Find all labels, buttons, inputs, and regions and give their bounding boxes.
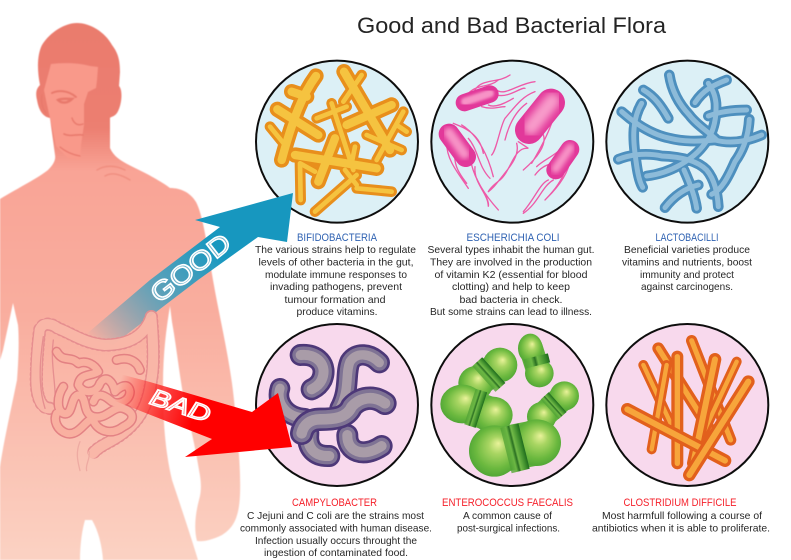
text block: clostridium difficile (592, 497, 770, 534)
arrow label: GOOD: GOOD (144, 227, 237, 309)
text block: campylobacter: commonly associated with human disease. (240, 522, 432, 534)
enterococcus cell bottom (469, 419, 561, 477)
text block: bifidobacteria: invading pathogens, prevent (270, 281, 402, 293)
panel: escherichia coli circle (431, 61, 593, 223)
clostridium rods (627, 341, 748, 475)
text block: bifidobacteria: produce vitamins. (296, 306, 378, 318)
title: Good and Bad Bacterial Flora (357, 13, 666, 38)
text block: escherichia coli: bad bacteria in check. (460, 294, 562, 306)
text block: escherichia coli: of vitamin K2 (essential for blood (434, 269, 588, 281)
enterococcus cell right (527, 381, 579, 431)
text block: lactobacilli: immunity and protect (640, 269, 734, 281)
text block: bifidobacteria: The various strains help to regulate (255, 244, 416, 256)
text block: escherichia coli: But some strains can lead to illness. (430, 306, 592, 318)
human body silhouette (0, 23, 240, 560)
text block: escherichia coli: Several types inhabit the human gut. (428, 244, 594, 256)
bacterium cells (449, 93, 570, 170)
facial features (42, 91, 130, 180)
panel: enterococcus faecalis circle (431, 324, 593, 486)
text block: lactobacilli: vitamins and nutrients, boost (622, 256, 752, 268)
text block: clostridium difficile: CLOSTRIDIUM DIFFICILE (624, 497, 736, 509)
text block: bifidobacteria: BIFIDOBACTERIA (297, 232, 378, 244)
text block: clostridium difficile: Most harmfull following a course of (602, 510, 762, 522)
text block: lactobacilli: LACTOBACILLI (656, 232, 718, 244)
arrow label: BAD: BAD (147, 383, 214, 427)
text block: escherichia coli: They are involved in the production (430, 256, 592, 268)
enterococcus cell upper left (458, 348, 517, 401)
bifidobacteria rods (270, 72, 407, 212)
text block: escherichia coli: ESCHERICHIA COLI (466, 232, 560, 244)
enterococcus cell left (440, 385, 513, 433)
panel: campylobacter circle (256, 324, 418, 486)
text block: lactobacilli: against carcinogens. (641, 281, 733, 293)
text block: escherichia coli (428, 232, 594, 318)
text block: lactobacilli (622, 232, 752, 293)
rectum (77, 442, 89, 471)
text block: enterococcus faecalis: post-surgical infections. (457, 522, 560, 534)
text block: campylobacter: Infection usually occurs throught the (255, 535, 417, 547)
text block: enterococcus faecalis: ENTEROCOCCUS FAECALIS (442, 497, 573, 509)
enterococcus cell top (518, 334, 554, 387)
text block: campylobacter: CAMPYLOBACTER (292, 497, 377, 509)
text block: enterococcus faecalis (442, 497, 573, 534)
panel: lactobacilli circle (606, 61, 768, 223)
lactobacilli chains (618, 75, 762, 208)
arrow: bad (100, 370, 292, 457)
intestines (36, 317, 153, 471)
text block: enterococcus faecalis: A common cause of (463, 510, 552, 522)
text block: bifidobacteria (255, 232, 416, 318)
panel: clostridium difficile circle (606, 324, 768, 486)
text block: campylobacter: ingestion of contaminated food. (264, 547, 408, 559)
text block: lactobacilli: Beneficial varieties produce (624, 244, 750, 256)
text block: bifidobacteria: modulate immune responses to (265, 269, 407, 281)
text block: bifidobacteria: tumour formation and (284, 294, 386, 306)
text block: campylobacter: C Jejuni and C coli are the strains most (247, 510, 424, 522)
text block: campylobacter (240, 497, 432, 559)
text block: escherichia coli: clotting) and help to keep (452, 281, 570, 293)
face highlight (44, 63, 98, 160)
campylobacter curved rods (279, 355, 385, 456)
arrow: good (83, 193, 293, 345)
flagella (447, 75, 570, 213)
large intestine (36, 317, 153, 453)
small intestine (55, 352, 140, 434)
text block: clostridium difficile: antibiotics when it is able to proliferate. (592, 522, 770, 534)
text block: bifidobacteria: levels of other bacteria in the gut, (258, 256, 414, 268)
panel: bifidobacteria circle (256, 61, 418, 223)
